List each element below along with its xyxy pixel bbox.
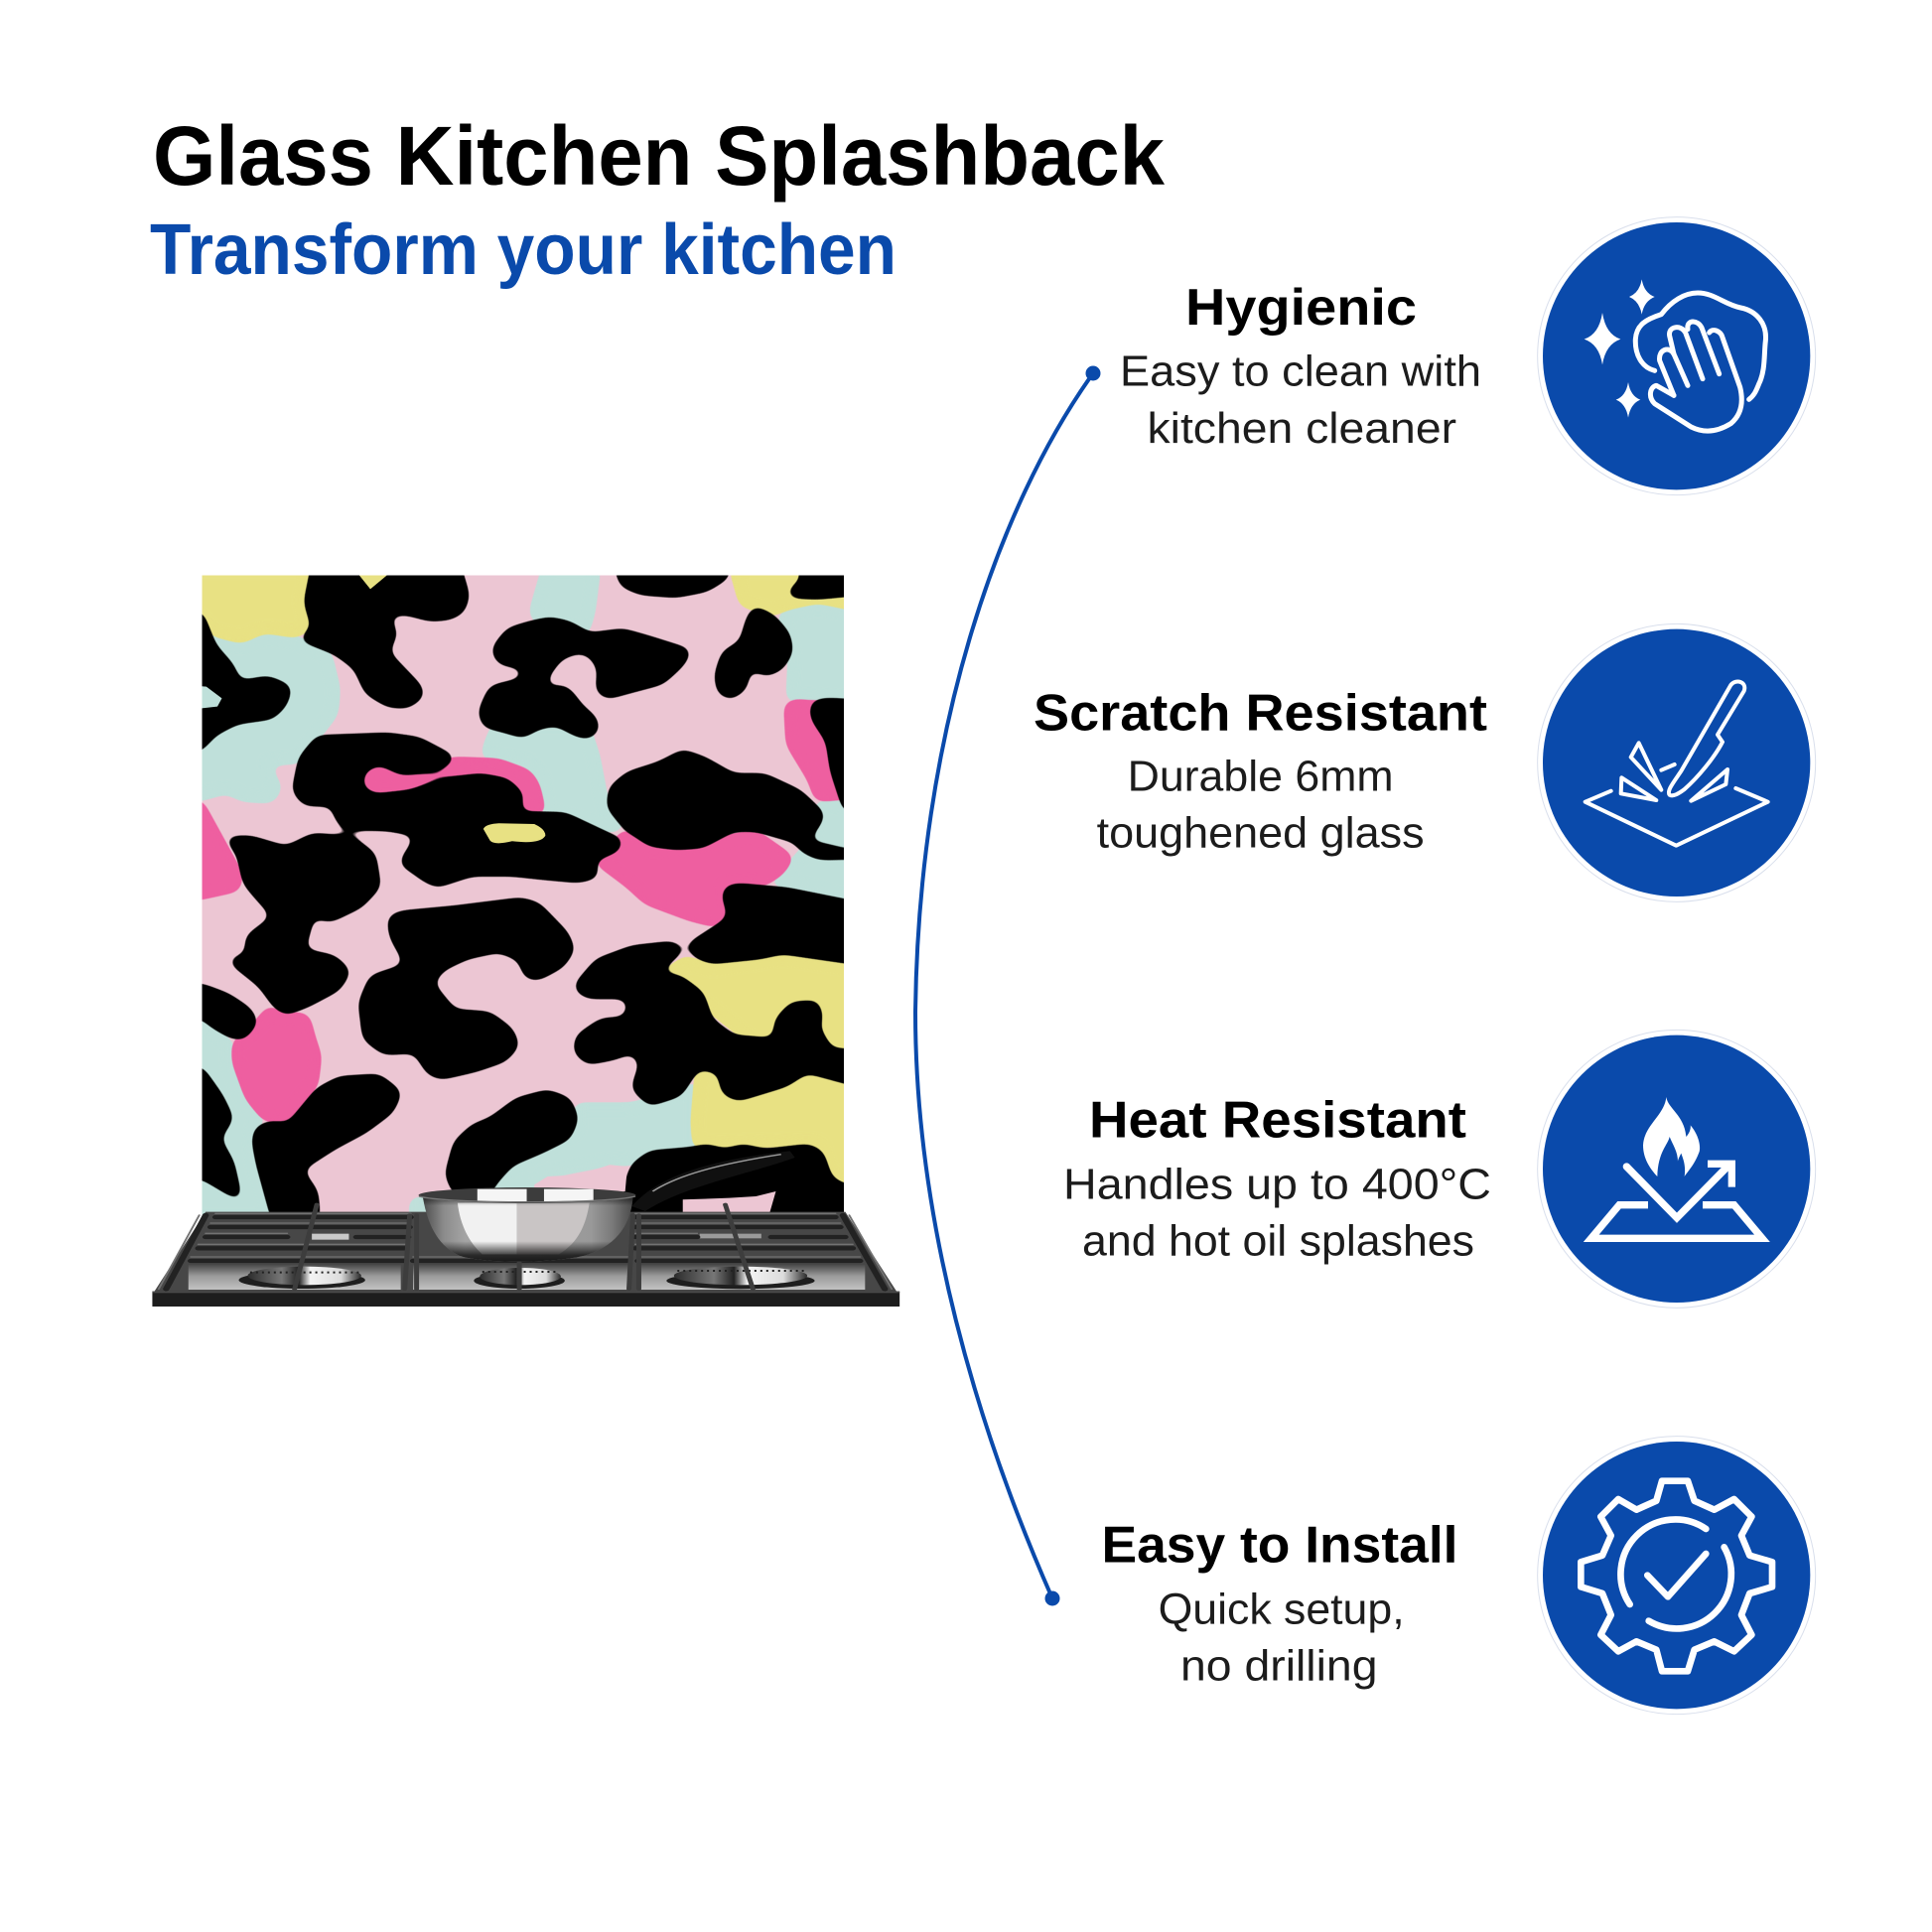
feature text: scratch resistant: toughened glass: [1097, 808, 1425, 858]
feature text: easy to install: Quick setup,: [1159, 1585, 1405, 1634]
dot: top: [1086, 365, 1100, 381]
dot: bottom: [1044, 1590, 1060, 1606]
gas hob with grates and burners: [152, 1204, 899, 1307]
right burner: [666, 1234, 815, 1289]
pan bowl: [423, 1198, 633, 1262]
feature text: heat resistant: and hot oil splashes: [1082, 1217, 1474, 1265]
feature text: scratch resistant: Durable 6mm: [1128, 753, 1394, 800]
frying pan: [419, 1151, 795, 1262]
icon: knife scratching glass: [1538, 623, 1816, 901]
feature text: hygienic: Hygienic: [1185, 279, 1417, 337]
feature text: scratch resistant: Scratch Resistant: [1034, 685, 1487, 743]
product image: splashback panel with pattern: [171, 563, 863, 1221]
pan rim: [419, 1187, 635, 1203]
icon: gear with check mark: [1538, 1437, 1816, 1715]
icon: hand wiping with sparkles: [1538, 217, 1816, 495]
left burner: [238, 1234, 365, 1289]
pan handle: [632, 1151, 795, 1211]
feature text: hygienic: kitchen cleaner: [1148, 404, 1456, 453]
feature text: hygienic: Easy to clean with: [1120, 347, 1481, 395]
feature text: easy to install: [1102, 1517, 1457, 1690]
title: Glass Kitchen Splashback: [153, 109, 1165, 203]
grate bars: [159, 1204, 892, 1289]
feature text: heat resistant: [1063, 1092, 1491, 1265]
connector curve: [915, 365, 1100, 1606]
feature text: easy to install: no drilling: [1180, 1642, 1378, 1690]
feature text: hygienic: [1120, 279, 1481, 453]
subtitle: Transform your kitchen: [150, 210, 897, 290]
feature text: heat resistant: Handles up to 400°C: [1063, 1160, 1491, 1209]
icon: flame with reflecting arrow: [1538, 1030, 1816, 1308]
feature text: scratch resistant: [1034, 685, 1487, 858]
feature text: heat resistant: Heat Resistant: [1089, 1092, 1466, 1150]
feature text: easy to install: Easy to Install: [1102, 1517, 1457, 1575]
centre burner: [474, 1268, 565, 1289]
